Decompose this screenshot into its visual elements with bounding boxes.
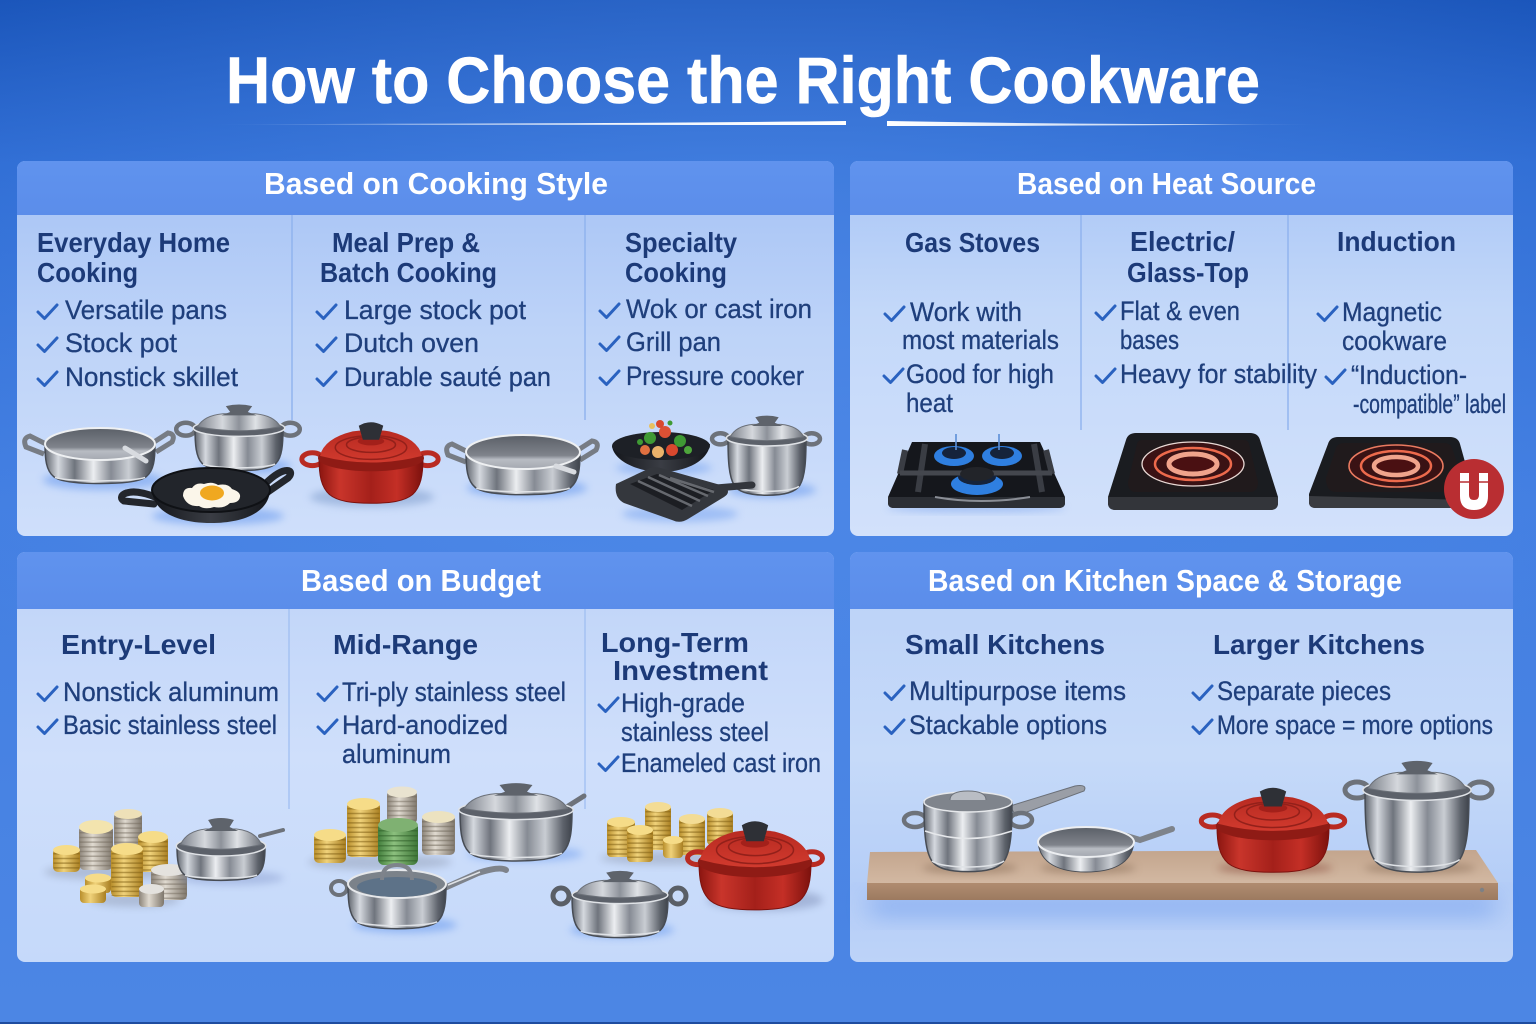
column heading: meal prep: Batch Cooking <box>320 257 497 288</box>
checklist: everyday home cooking <box>38 295 239 392</box>
heading: cooking style: Based on Cooking Style <box>264 166 608 201</box>
title underline <box>205 121 1320 126</box>
checklist: entry-level: Basic stainless steel <box>63 710 277 740</box>
icon: magnet badge <box>1444 459 1504 519</box>
column heading: electric glass-top: Electric/ <box>1130 226 1235 257</box>
icon: red dutch oven on shelf <box>1201 788 1345 874</box>
checklist: long-term investment: stainless steel <box>621 717 769 747</box>
column heading: larger kitchens: Larger Kitchens <box>1213 629 1425 660</box>
icon: gas stove <box>886 434 1066 512</box>
column heading: electric glass-top <box>1127 226 1249 288</box>
icon: long-term steel pot <box>553 871 686 938</box>
checklist: gas stoves: Work with <box>910 297 1022 327</box>
panel: based on heat source <box>850 161 1513 536</box>
checklist: larger kitchens: More space = more options <box>1217 710 1493 740</box>
icon: large stock pot on shelf <box>1345 761 1492 874</box>
checklist: electric glass-top <box>1096 296 1318 389</box>
checklist: specialty cooking: Wok or cast iron <box>626 294 812 324</box>
column heading: induction: Induction <box>1337 226 1456 257</box>
column heading: long-term investment: Long-Term <box>601 627 749 658</box>
checklist: everyday home cooking: Nonstick skillet <box>65 362 239 392</box>
icon: long-term red dutch oven <box>688 821 823 911</box>
icon: induction cooktop <box>1309 437 1504 519</box>
icon: steel pan <box>25 428 173 490</box>
column heading: meal prep <box>320 227 497 288</box>
icon: entry-level saucepan <box>176 818 284 885</box>
checklist: larger kitchens: Separate pieces <box>1217 676 1391 706</box>
icon: wok with vegetables <box>612 420 712 475</box>
checklist: small kitchens: Multipurpose items <box>909 676 1126 706</box>
panel background <box>17 552 834 962</box>
panel background <box>17 161 834 536</box>
checklist: mid-range: Hard-anodized <box>342 710 508 740</box>
checklist: induction: “Induction- <box>1351 360 1467 390</box>
column heading: specialty cooking <box>625 227 737 288</box>
checklist: entry-level: Nonstick aluminum <box>63 677 279 707</box>
icon: mid-range stock pot <box>459 783 584 862</box>
column heading: meal prep: Meal Prep & <box>332 227 480 258</box>
checklist: specialty cooking: Pressure cooker <box>626 361 804 391</box>
column heading: everyday home cooking: Everyday Home <box>37 227 230 258</box>
checklist: specialty cooking: Grill pan <box>626 327 721 357</box>
column heading: long-term investment <box>601 627 768 686</box>
checklist: small kitchens: Stackable options <box>909 710 1107 740</box>
column heading: entry-level: Entry-Level <box>61 629 216 660</box>
icon: mid-range coin stacks <box>308 786 455 870</box>
checklist: gas stoves: most materials <box>902 325 1059 355</box>
checklist: larger kitchens <box>1193 676 1493 740</box>
panel: based on cooking style <box>17 161 834 536</box>
heading: heat source: Based on Heat Source <box>1017 166 1316 201</box>
column heading: specialty cooking: Specialty <box>625 227 737 258</box>
checklist: everyday home cooking: Stock pot <box>65 328 178 358</box>
icon: pressure cooker <box>712 416 820 498</box>
checklist: mid-range: Tri-ply stainless steel <box>342 677 566 707</box>
icon: entry-level coin stacks <box>44 809 187 907</box>
panel background <box>850 552 1513 962</box>
column heading: small kitchens: Small Kitchens <box>905 629 1105 660</box>
icon: grill pan <box>616 467 752 522</box>
checklist: gas stoves <box>884 297 1059 418</box>
checklist: small kitchens <box>885 676 1126 740</box>
checklist: meal prep: Durable sauté pan <box>344 362 551 392</box>
icon: stacked steel pots <box>904 786 1085 874</box>
icon: stock pot with lid <box>176 404 300 474</box>
checklist: mid-range <box>318 677 566 769</box>
icon: small skillet <box>1038 827 1172 874</box>
checklist: meal prep: Large stock pot <box>344 295 527 325</box>
checklist: electric glass-top: bases <box>1120 325 1179 355</box>
icon: electric glass-top cooktop <box>1108 433 1278 510</box>
checklist: mid-range: aluminum <box>342 739 451 769</box>
column heading: gas stoves: Gas Stoves <box>905 227 1040 258</box>
checklist: induction: Magnetic <box>1342 297 1442 327</box>
checklist: electric glass-top: Flat & even <box>1120 296 1240 326</box>
checklist: long-term investment: High-grade <box>621 688 745 718</box>
checklist: everyday home cooking: Versatile pans <box>65 295 227 325</box>
column heading: everyday home cooking <box>37 227 230 288</box>
column heading: mid-range: Mid-Range <box>333 629 478 660</box>
checklist: gas stoves: heat <box>906 388 954 418</box>
checklist: meal prep <box>317 295 551 392</box>
title: How to Choose the Right Cookware <box>226 43 1260 117</box>
checklist: entry-level <box>38 677 279 740</box>
panel: based on kitchen space and storage <box>850 552 1513 962</box>
column heading: long-term investment: Investment <box>613 655 768 686</box>
checklist: long-term investment: Enameled cast iron <box>621 748 821 778</box>
checklist: induction <box>1318 297 1506 419</box>
checklist: specialty cooking <box>600 294 812 391</box>
column heading: specialty cooking: Cooking <box>625 257 727 288</box>
heading: budget: Based on Budget <box>301 563 541 598</box>
icon: long-term coin stacks <box>600 802 733 865</box>
panel background <box>850 161 1513 536</box>
panel: based on budget <box>17 552 834 962</box>
checklist: long-term investment <box>599 688 821 778</box>
checklist: electric glass-top: Heavy for stability <box>1120 359 1318 389</box>
icon: nonstick skillet with egg <box>122 468 291 525</box>
column heading: everyday home cooking: Cooking <box>37 257 138 288</box>
icon: mid-range saucepan <box>331 865 506 933</box>
icon: saute pan <box>447 435 597 498</box>
icon: red dutch oven <box>302 422 438 507</box>
heading: kitchen space: Based on Kitchen Space & Storage <box>928 563 1402 598</box>
checklist: induction: cookware <box>1342 326 1447 356</box>
checklist: gas stoves: Good for high <box>906 359 1054 389</box>
icon: wooden shelf <box>867 850 1498 914</box>
column heading: electric glass-top: Glass-Top <box>1127 257 1249 288</box>
checklist: meal prep: Dutch oven <box>344 328 479 358</box>
